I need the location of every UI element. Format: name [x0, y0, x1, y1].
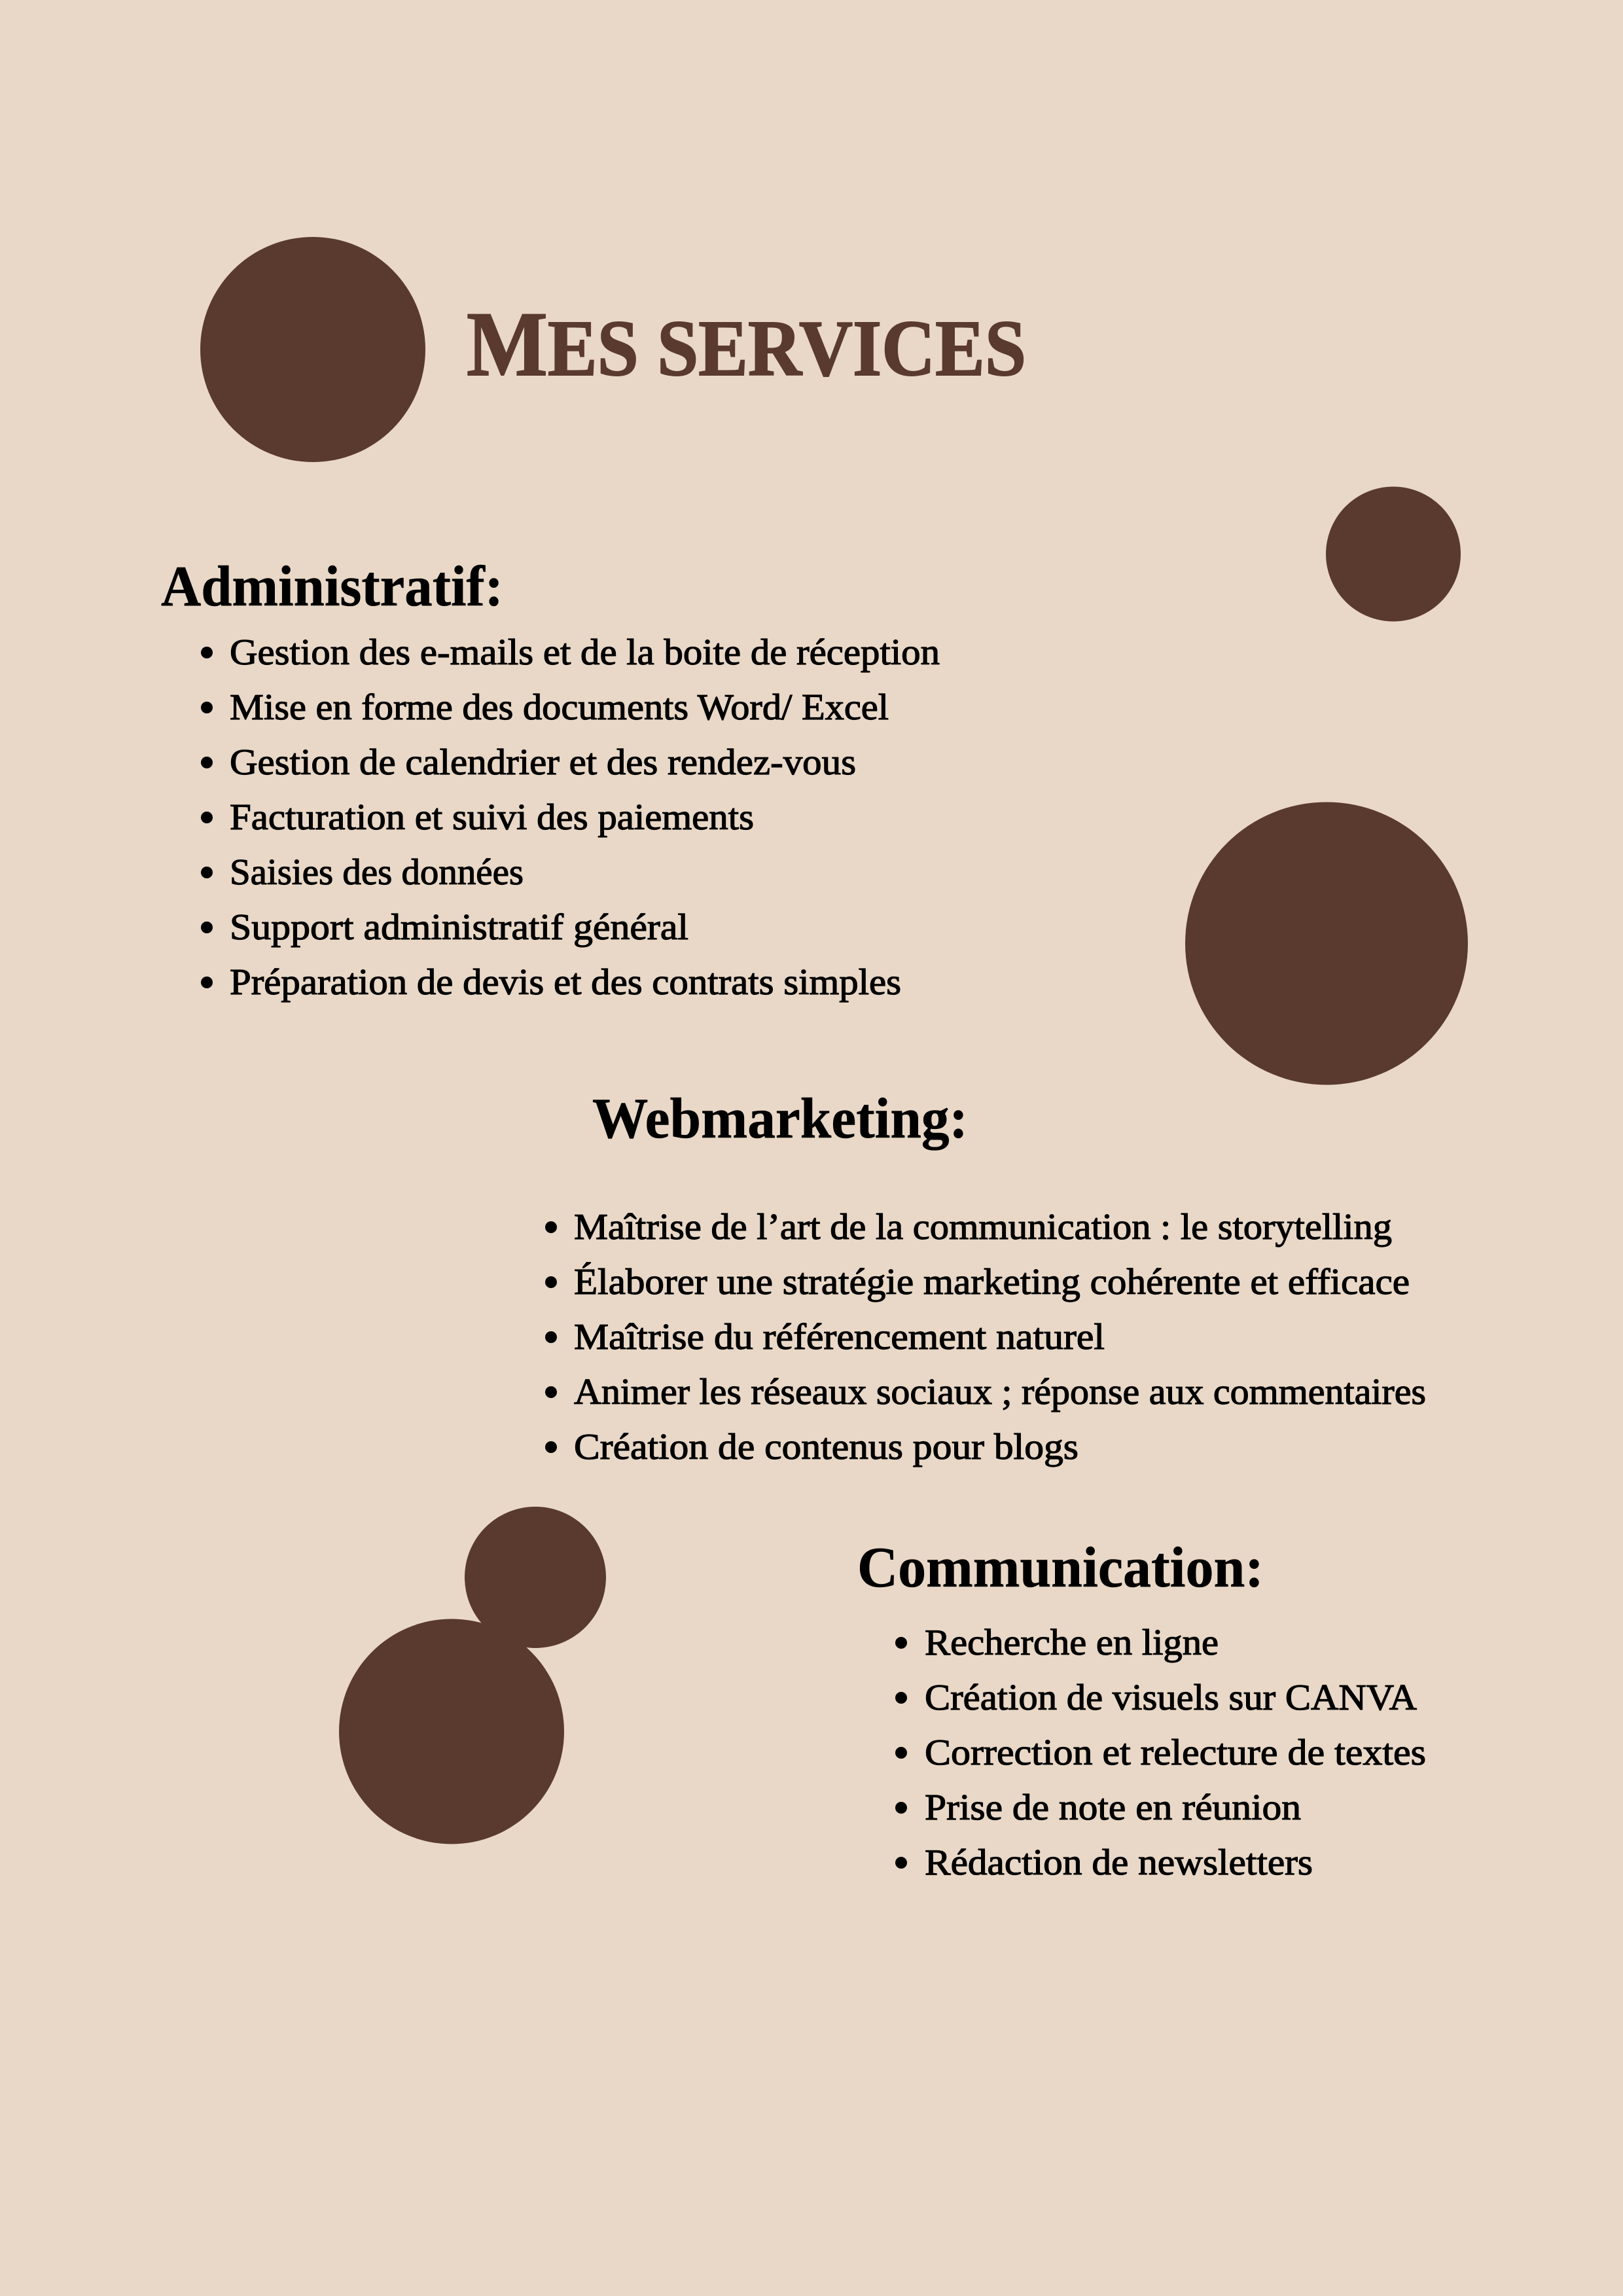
list: webmarketing services: Élaborer une stratégie marketing cohérente et efficace	[574, 1262, 1410, 1302]
list: communication services	[895, 1623, 1426, 1883]
list: administratif services: Support administratif général	[230, 907, 688, 948]
list: webmarketing services: Animer les réseaux sociaux ; réponse aux commentaires	[574, 1372, 1426, 1412]
list: administratif services	[201, 632, 940, 1003]
heading: webmarketing: Webmarketing:	[592, 1087, 968, 1151]
list: administratif services: Préparation de devis et des contrats simples	[230, 962, 901, 1003]
decorative circle: title	[200, 237, 425, 462]
decorative circle: lower left large	[339, 1619, 564, 1844]
list: administratif services: Gestion des e-mails et de la boite de réception	[230, 632, 940, 673]
title: MES SERVICES	[467, 293, 1026, 395]
list: administratif services: Facturation et suivi des paiements	[230, 797, 754, 838]
list: administratif services: Saisies des données	[230, 852, 524, 893]
list: administratif services: Mise en forme des documents Word/ Excel	[230, 687, 889, 728]
panel: communication	[857, 1536, 1426, 1883]
list: communication services: Prise de note en réunion	[925, 1787, 1301, 1828]
list: webmarketing services: Maîtrise du référencement naturel	[574, 1317, 1105, 1357]
panel: webmarketing	[545, 1087, 1426, 1467]
decorative circle: top right small	[1326, 487, 1461, 622]
heading: administratif: Administratif:	[161, 555, 503, 619]
list: webmarketing services	[545, 1207, 1426, 1467]
list: webmarketing services: Maîtrise de l’art de la communication : le storytelling	[574, 1207, 1392, 1247]
decorative circle: lower left small	[465, 1507, 606, 1648]
list: communication services: Rédaction de newsletters	[925, 1842, 1313, 1883]
heading: communication: Communication:	[857, 1536, 1264, 1600]
list: communication services: Recherche en ligne	[925, 1623, 1219, 1663]
decorative circle: right large	[1185, 802, 1468, 1085]
list: communication services: Création de visuels sur CANVA	[925, 1677, 1418, 1718]
list: webmarketing services: Création de contenus pour blogs	[574, 1427, 1079, 1467]
panel: administratif	[161, 555, 940, 1003]
list: communication services: Correction et relecture de textes	[925, 1732, 1426, 1773]
list: administratif services: Gestion de calendrier et des rendez-vous	[230, 742, 856, 783]
